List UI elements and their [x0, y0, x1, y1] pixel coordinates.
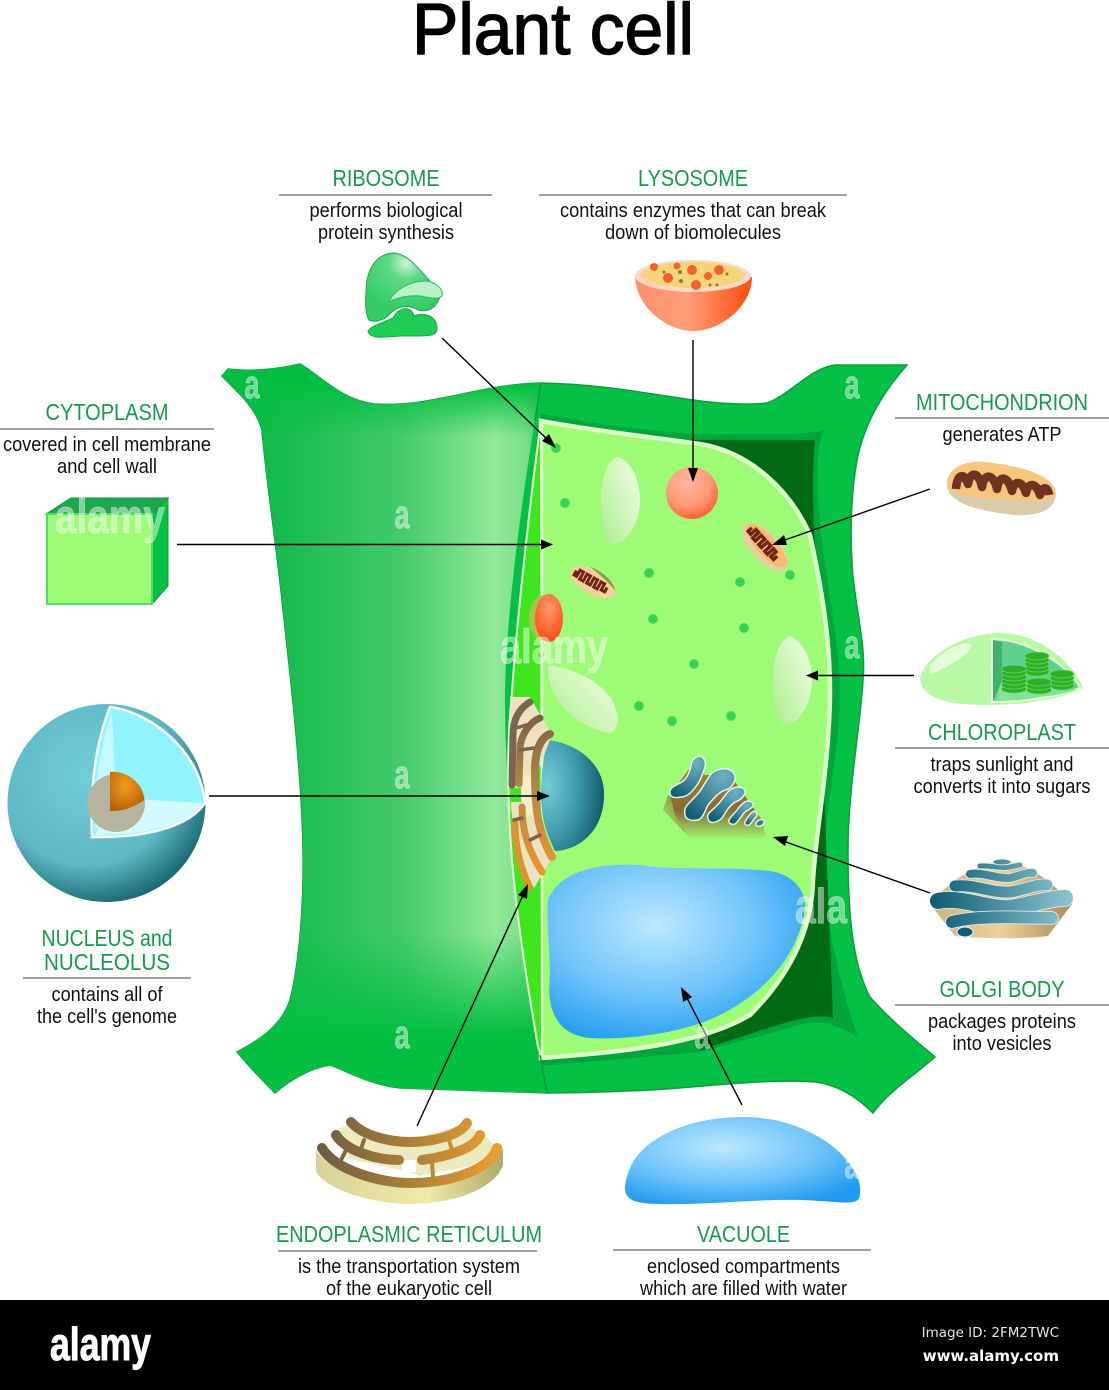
label: mitochondrion: generates ATP — [942, 424, 1062, 446]
label: lysosome: contains enzymes that can break — [560, 200, 827, 222]
wall edge line — [535, 383, 547, 1093]
label: nucleus and nucleolus: NUCLEOLUS — [44, 949, 170, 975]
watermarks: a — [694, 1013, 710, 1057]
label: golgi body: into vesicles — [952, 1033, 1052, 1055]
cell wall front face — [222, 364, 547, 1093]
arrow: vacuole — [681, 987, 742, 1105]
label: chloroplast: CHLOROPLAST — [928, 719, 1076, 745]
label: vacuole: VACUOLE — [697, 1221, 790, 1247]
watermarks: a — [844, 623, 860, 667]
membrane cut strip — [508, 421, 542, 1057]
label: vacuole: enclosed compartments — [647, 1256, 840, 1278]
chloroplast lower — [548, 665, 618, 733]
watermarks: alamy — [55, 491, 165, 544]
nucleus — [541, 740, 604, 851]
watermarks: a — [244, 363, 260, 407]
label: endoplasmic reticulum: of the eukaryotic cell — [326, 1278, 492, 1300]
icon: nucleus and nucleolus — [8, 704, 206, 902]
chloroplast right — [773, 636, 812, 725]
footer bar: alamy — [50, 1318, 151, 1370]
icon: endoplasmic reticulum — [316, 1122, 503, 1204]
label: nucleus and nucleolus: NUCLEUS and — [42, 925, 172, 951]
lysosome — [666, 467, 718, 519]
label: nucleus and nucleolus: the cell's genome — [37, 1006, 177, 1028]
arrow: lysosome — [688, 340, 698, 482]
inner wall band — [541, 414, 858, 1066]
watermarks: ala — [795, 880, 848, 934]
label: chloroplast: traps sunlight and — [930, 754, 1074, 776]
vacuole — [548, 865, 805, 1038]
arrow: nucleus — [209, 791, 550, 801]
label: ribosome: protein synthesis — [318, 222, 454, 244]
inner wall recess shadow — [690, 440, 833, 1050]
label: chloroplast: converts it into sugars — [914, 776, 1090, 798]
front face shading — [222, 364, 547, 1093]
plant cell diagram — [222, 364, 935, 1113]
arrow: ribosome — [442, 338, 556, 448]
watermarks: a — [394, 753, 410, 797]
label: golgi body: GOLGI BODY — [940, 976, 1064, 1002]
label: nucleus and nucleolus — [23, 925, 191, 1028]
icon: chloroplast — [920, 633, 1083, 705]
mitochondrion left — [565, 559, 621, 605]
watermarks: a — [844, 363, 860, 407]
label: cytoplasm: covered in cell membrane — [3, 434, 211, 456]
label: chloroplast — [895, 719, 1109, 798]
watermarks — [55, 363, 860, 1187]
label: vacuole: which are filled with water — [639, 1278, 847, 1300]
icon: mitochondrion — [947, 462, 1056, 515]
grana stacks — [1002, 652, 1074, 694]
label: golgi body: packages proteins — [928, 1011, 1076, 1033]
icon: lysosome — [635, 260, 752, 331]
footer bar — [0, 1300, 1109, 1390]
icon: ribosome — [366, 253, 442, 337]
footer bar: Image ID: 2FM2TWC — [922, 1325, 1059, 1341]
mitochondrion right — [735, 515, 795, 579]
label: ribosome: performs biological — [310, 200, 462, 222]
label: endoplasmic reticulum: ENDOPLASMIC RETICULUM — [276, 1221, 542, 1247]
label: lysosome: LYSOSOME — [638, 165, 748, 191]
label: cytoplasm: and cell wall — [57, 456, 157, 478]
label: lysosome: down of biomolecules — [605, 222, 781, 244]
label: ribosome: RIBOSOME — [332, 165, 440, 191]
label: nucleus and nucleolus: contains all of — [52, 984, 163, 1006]
lysosome small — [529, 594, 563, 642]
label: endoplasmic reticulum — [276, 1221, 542, 1300]
ribosome dots — [552, 444, 794, 726]
chloroplast upper — [601, 457, 640, 545]
footer bar: www.alamy.com — [923, 1347, 1059, 1365]
label: golgi body — [895, 976, 1109, 1055]
watermarks: alamy — [500, 621, 608, 674]
label: cytoplasm: CYTOPLASM — [46, 399, 168, 425]
icon: vacuole — [625, 1117, 860, 1204]
arrow: cytoplasm — [177, 540, 553, 550]
label: mitochondrion: MITOCHONDRION — [916, 389, 1088, 415]
label: endoplasmic reticulum: is the transportation system — [298, 1256, 520, 1278]
label: ribosome — [279, 165, 492, 244]
cytoplasm and membrane — [541, 421, 830, 1058]
label: cytoplasm — [0, 399, 214, 478]
label: lysosome — [539, 165, 847, 244]
label: vacuole — [613, 1221, 871, 1300]
arrow: endoplasmic reticulum — [417, 884, 528, 1126]
icon: golgi body — [930, 859, 1072, 938]
label: mitochondrion — [895, 389, 1109, 446]
watermarks: a — [394, 1013, 410, 1057]
cell wall — [222, 364, 935, 1113]
watermarks: a — [844, 1143, 860, 1187]
icon: cytoplasm cube — [46, 498, 168, 604]
watermarks: a — [394, 493, 410, 537]
arrow: golgi body — [773, 836, 930, 893]
arrow: mitochondrion — [772, 489, 930, 545]
endoplasmic reticulum — [510, 697, 552, 888]
arrow: chloroplast — [806, 670, 914, 680]
golgi body — [663, 756, 766, 840]
